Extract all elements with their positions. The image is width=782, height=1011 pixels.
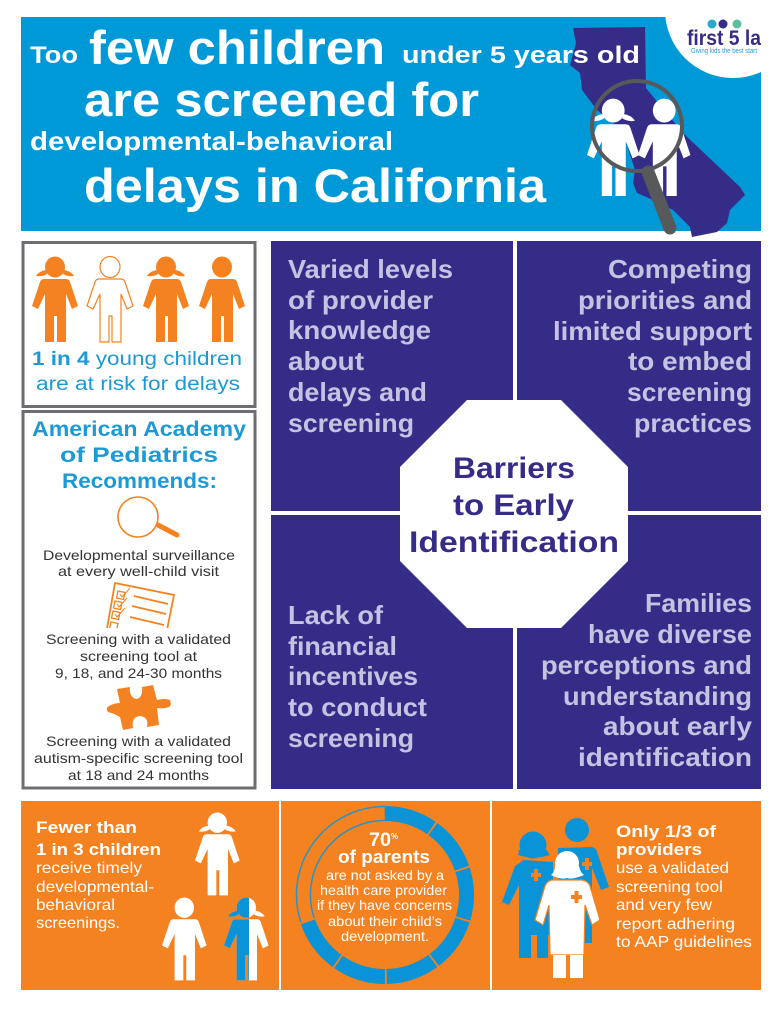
stat text: to AAP guidelines [616,934,752,951]
stat text: about their child’s [328,913,442,929]
recommendation: validated tool: 9, 18, and 24-30 months [55,665,222,681]
recommendation: autism-specific tool: at 18 and 24 months [68,767,209,783]
title: developmental-behavioral [30,126,393,156]
recommendation: surveillance: Developmental surveillance [43,547,235,563]
quadrant: competing priorities: to embed [628,346,752,376]
recommendation: autism-specific tool: Screening with a validated [46,733,231,749]
stat text: and very few [616,897,712,914]
stat text [616,822,752,951]
logo: first 5 la: Giving kids the best start [691,48,757,55]
heading: Recommends: [62,470,217,493]
recommendation: validated tool: Screening with a validated [46,631,231,647]
panel: AAP recommendations [23,412,255,788]
icon: checklist [106,582,175,628]
stat text: behavioral [36,897,115,914]
quadrant: family perceptions: identification [578,742,752,772]
icon: three children, one half blue [162,812,269,980]
quadrant: provider knowledge: delays and [288,377,427,407]
octagon: barriers to early identification [400,400,628,628]
stat text: if they have concerns [317,897,452,913]
quadrant: family perceptions: understanding [563,681,752,711]
icon: three health care providers [502,818,609,978]
quadrant: financial incentives: incentives [288,661,418,691]
quadrant: competing priorities: practices [634,408,752,438]
quadrant: competing priorities: priorities and [578,285,752,315]
logo: first 5 la: first 5 la [687,27,761,50]
octagon: barriers to early identification: Identification [409,526,619,559]
quadrant: competing priorities [517,241,761,511]
stat text: of parents [338,847,430,867]
quadrant: provider knowledge: of provider [288,285,433,315]
quadrant: provider knowledge: about [288,346,364,376]
quadrant: financial incentives: financial [288,631,397,661]
octagon: barriers to early identification: to Early [453,489,574,522]
heading: of Pediatrics [60,444,218,467]
stat text: % [391,832,398,841]
statistic text: 1 in 4 young children [32,349,242,370]
stat text: development. [341,928,429,944]
icon: four children [32,256,245,342]
title: few children [89,21,385,74]
icon: puzzle piece [107,685,171,730]
quadrant: family perceptions: have diverse [588,619,752,649]
icon: magnifying glass [118,497,177,537]
quadrant: financial incentives: Lack of [288,600,383,630]
statistic text [32,349,242,395]
stat text [36,818,161,932]
heading [32,418,246,493]
quadrant: provider knowledge: Varied levels [288,254,453,284]
panel: barriers [271,241,761,789]
stat text: screening tool [616,879,723,896]
title: are screened for [84,73,479,126]
recommendation: surveillance: at every well-child visit [58,563,219,579]
stat text: screenings. [36,915,120,932]
title: under 5 years old [402,42,640,69]
recommendation: surveillance [43,547,235,579]
stat text: report adhering [616,916,735,933]
recommendation: validated tool: screening tool at [80,648,197,664]
quadrant: provider knowledge: knowledge [288,315,431,345]
quadrant: competing priorities: Competing [608,254,752,284]
quadrant: financial incentives: screening [288,723,414,753]
panel: 1 in 4 children [23,242,255,406]
stat text: developmental- [36,879,154,896]
statistic text: are at risk for delays [36,374,240,395]
header banner [21,0,782,237]
panel: fewer than 1 in 3 [21,801,279,990]
donut chart: 70 percent [296,806,466,976]
quadrant: provider knowledge [271,241,513,511]
stat text: 70 [369,830,391,851]
quadrant: competing priorities: screening [627,377,752,407]
stat text: 1 in 3 children [36,840,161,859]
icon: two children under magnifying glass [587,81,690,228]
panel: 70 percent of parents [281,801,490,990]
stat text: providers [616,840,702,859]
stat text: receive timely [36,860,142,877]
title: Too [30,42,78,69]
recommendation: autism-specific tool [34,733,243,783]
quadrant: provider knowledge: screening [288,408,414,438]
logo: first 5 la [665,17,762,78]
quadrant: competing priorities: limited support [553,316,752,346]
title [30,21,640,212]
panel: only 1/3 of providers [492,801,761,990]
recommendation: validated tool [46,631,231,681]
quadrant: financial incentives: to conduct [288,692,427,722]
heading: American Academy [32,418,246,441]
quadrant: family perceptions: Families [645,588,752,618]
stat text [317,830,452,944]
stat text: Fewer than [36,818,137,837]
stat text: use a validated [616,860,729,877]
quadrant: family perceptions [517,515,761,789]
quadrant: family perceptions: perceptions and [541,650,752,680]
recommendation: autism-specific tool: autism-specific screening tool [34,750,243,766]
octagon: barriers to early identification: Barriers [453,452,575,485]
quadrant: family perceptions: about early [603,711,753,741]
stat text: health care provider [320,882,447,898]
map of California [570,27,745,237]
quadrant: financial incentives [271,515,513,789]
title: delays in California [84,159,547,212]
stat text: are not asked by a [326,867,444,883]
stat text: Only 1/3 of [616,822,716,841]
